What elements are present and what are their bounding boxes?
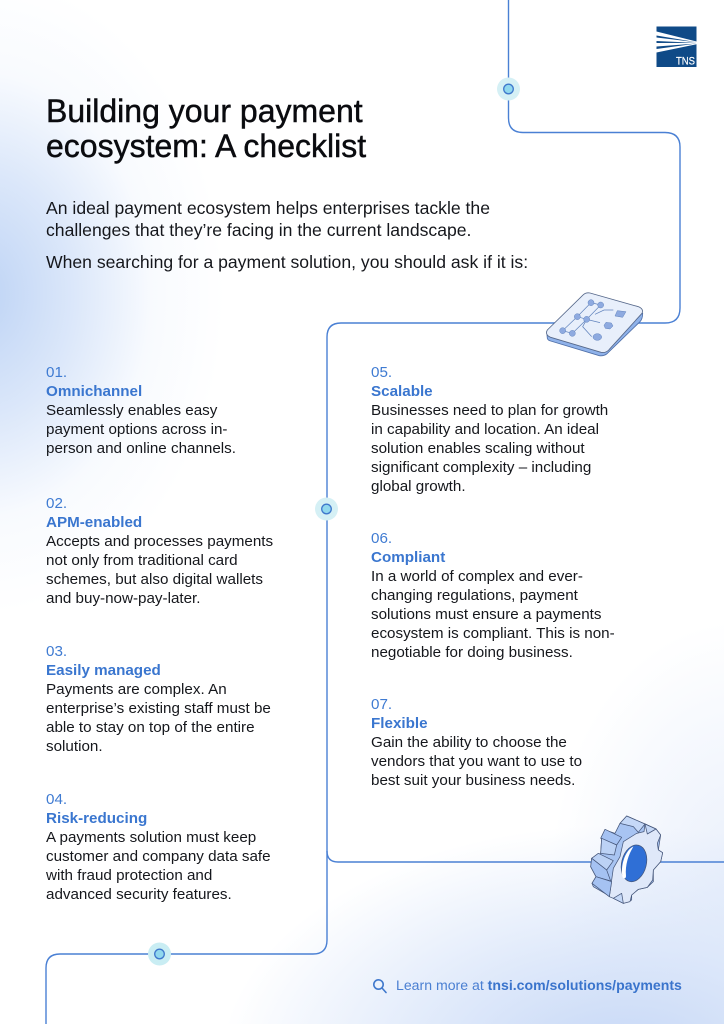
- item 02: not only from traditional card: [46, 552, 238, 569]
- item 05: Businesses need to plan for growth: [371, 402, 608, 419]
- item 06: In a world of complex and ever-: [371, 568, 583, 585]
- item 01: 01.: [46, 364, 67, 381]
- item 01: Omnichannel: [46, 383, 142, 400]
- item 05: significant complexity – including: [371, 459, 591, 476]
- title: Building your payment: [46, 93, 363, 129]
- item 06: 06.: [371, 530, 392, 547]
- item 02: 02.: [46, 495, 67, 512]
- item 05: [371, 364, 608, 495]
- item 07: 07.: [371, 696, 392, 713]
- item 01: [46, 364, 236, 457]
- item 07: Gain the ability to choose the: [371, 734, 567, 751]
- item 07: [371, 696, 582, 789]
- item 03: 03.: [46, 643, 67, 660]
- item 05: Scalable: [371, 383, 433, 400]
- item 02: Accepts and processes payments: [46, 533, 273, 550]
- item 06: solutions must ensure a payments: [371, 606, 601, 623]
- item 03: [46, 643, 271, 755]
- lead-in question: When searching for a payment solution, you should ask if it is:: [46, 252, 528, 272]
- item 04: Risk-reducing: [46, 810, 147, 827]
- item 06: [371, 530, 615, 661]
- item 02: [46, 495, 273, 607]
- item 01: person and online channels.: [46, 440, 236, 457]
- call to action: Learn more at tnsi.com/solutions/payments: [396, 977, 682, 993]
- item 01: Seamlessly enables easy: [46, 402, 217, 419]
- intro text: [46, 198, 490, 240]
- item 03: able to stay on top of the entire: [46, 719, 255, 736]
- item 06: ecosystem is compliant. This is non-: [371, 625, 615, 642]
- item 05: 05.: [371, 364, 392, 381]
- item 04: advanced security features.: [46, 886, 232, 903]
- item 04: A payments solution must keep: [46, 829, 256, 846]
- item 03: Payments are complex. An: [46, 681, 227, 698]
- item 06: changing regulations, payment: [371, 587, 578, 604]
- title: [46, 93, 366, 164]
- intro text: challenges that they’re facing in the current landscape.: [46, 220, 471, 240]
- item 02: APM-enabled: [46, 514, 142, 531]
- item 04: customer and company data safe: [46, 848, 271, 865]
- item 06: negotiable for doing business.: [371, 644, 573, 661]
- item 05: global growth.: [371, 478, 466, 495]
- item 05: solution enables scaling without: [371, 440, 585, 457]
- item 03: solution.: [46, 738, 103, 755]
- item 05: in capability and location. An ideal: [371, 421, 599, 438]
- item 02: and buy-now-pay-later.: [46, 590, 200, 607]
- item 03: Easily managed: [46, 662, 161, 679]
- item 04: with fraud protection and: [46, 867, 212, 884]
- item 04: [46, 791, 271, 903]
- item 07: Flexible: [371, 715, 428, 732]
- item 07: best suit your business needs.: [371, 772, 575, 789]
- item 07: vendors that you want to use to: [371, 753, 582, 770]
- item 01: payment options across in-: [46, 421, 228, 438]
- item 06: Compliant: [371, 549, 445, 566]
- logo: TNS: TNS: [676, 55, 695, 67]
- intro text: An ideal payment ecosystem helps enterprises tackle the: [46, 198, 490, 218]
- title: ecosystem: A checklist: [46, 128, 366, 164]
- item 02: schemes, but also digital wallets: [46, 571, 263, 588]
- item 03: enterprise’s existing staff must be: [46, 700, 271, 717]
- item 04: 04.: [46, 791, 67, 808]
